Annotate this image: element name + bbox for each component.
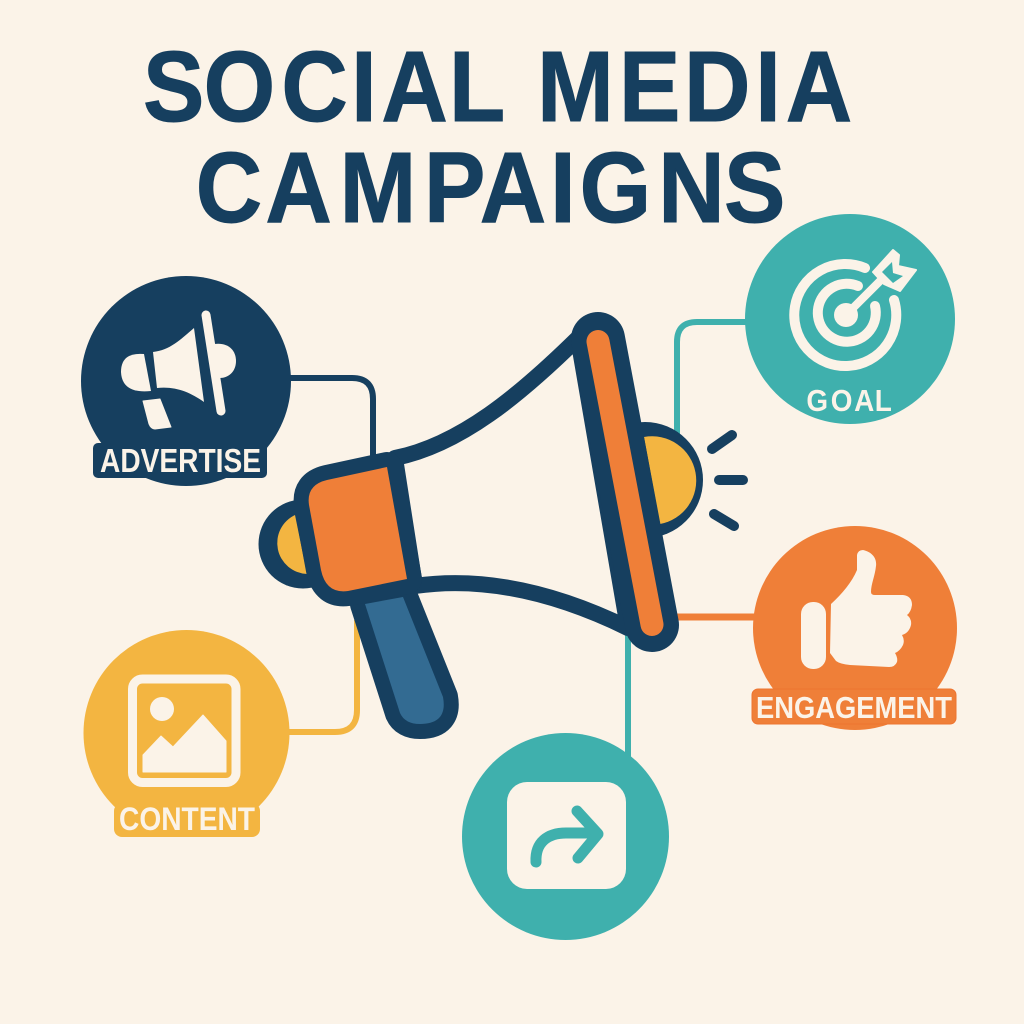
megaphone body [309, 467, 407, 591]
title: SOCIAL MEDIA [143, 31, 852, 143]
sound lines [712, 435, 743, 526]
connector: advertise [285, 378, 373, 462]
icon: megaphone [121, 315, 236, 429]
connector: share [625, 630, 631, 760]
label: content: CONTENT [119, 801, 255, 837]
megaphone mouth band [598, 339, 652, 625]
megaphone rear cap [258, 500, 348, 588]
panel: goal [745, 214, 955, 424]
label: engagement: ENGAGEMENT [756, 690, 952, 725]
panel: share [462, 733, 669, 940]
megaphone front cap [587, 422, 703, 538]
connector: engagement [670, 614, 760, 620]
title: CAMPAIGNS [196, 132, 785, 244]
connector: goal [677, 322, 750, 435]
connector: content [280, 620, 357, 732]
panel: advertise [81, 276, 291, 486]
icon: share arrow [507, 782, 626, 889]
label: goal: GOAL [806, 384, 892, 418]
megaphone horn [395, 338, 628, 628]
label: advertise: ADVERTISE [100, 442, 261, 479]
central megaphone [258, 338, 743, 724]
icon: thumbs up [801, 550, 912, 669]
panel: engagement [752, 526, 957, 730]
icon: target [794, 250, 916, 366]
panel: content [84, 630, 290, 837]
icon: image [132, 679, 236, 782]
megaphone handle [365, 597, 444, 724]
title [143, 31, 852, 244]
